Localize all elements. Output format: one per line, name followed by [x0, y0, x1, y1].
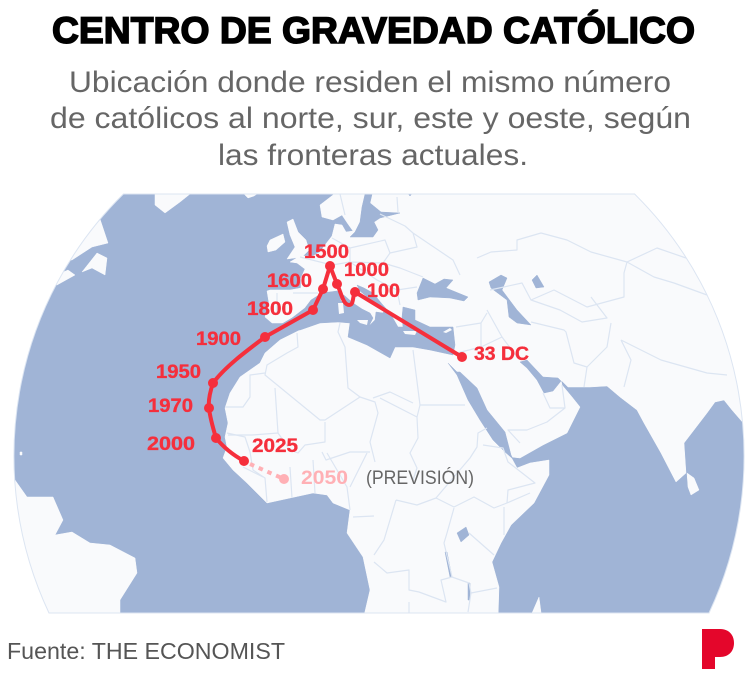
- source: Fuente: THE ECONOMIST: [7, 638, 285, 664]
- water bodies: [280, 190, 561, 600]
- forecast label: [301, 467, 474, 489]
- year labels: 1900: [196, 329, 241, 350]
- forecast route to 2050: [250, 464, 289, 484]
- subtitle: de católicos al norte, sur, este y oeste, según: [50, 102, 691, 135]
- year labels: 1950: [156, 362, 201, 383]
- year labels: [147, 242, 529, 457]
- year labels: 2025: [252, 436, 298, 457]
- subtitle: [50, 66, 691, 172]
- map outline: [14, 194, 744, 613]
- subtitle: las fronteras actuales.: [218, 139, 528, 172]
- country borders: [225, 194, 727, 620]
- year labels: 33 DC: [474, 344, 529, 365]
- year labels: 1500: [304, 242, 349, 263]
- year labels: 1600: [267, 271, 312, 292]
- islands: [338, 295, 452, 335]
- year labels: 2000: [147, 434, 195, 455]
- map: [0, 190, 747, 625]
- logo: [702, 629, 734, 669]
- forecast label: 2050: [301, 468, 348, 489]
- route line: 33 DC to 2025: [204, 261, 467, 466]
- forecast label: (PREVISIÓN): [366, 467, 474, 489]
- year labels: 1970: [148, 396, 193, 417]
- subtitle: Ubicación donde residen el mismo número: [69, 66, 671, 99]
- title: CENTRO DE GRAVEDAD CATÓLICO: [52, 9, 695, 51]
- year labels: 1800: [247, 299, 293, 320]
- year labels: 100: [367, 281, 400, 302]
- year labels: 1000: [344, 260, 389, 281]
